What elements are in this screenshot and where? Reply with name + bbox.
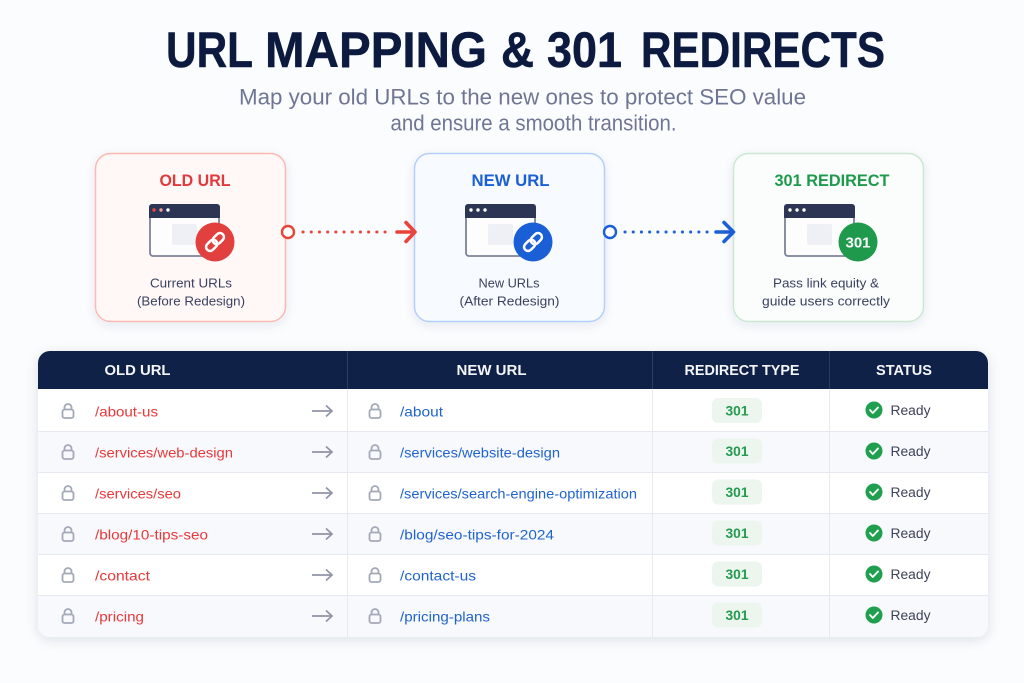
row: contact: Ready	[890, 567, 931, 582]
description: 301 redirect: guide users correctly	[762, 294, 891, 308]
row: contact: /contact	[95, 568, 150, 584]
table header: NEW URL	[456, 363, 527, 379]
description: new URL: New URLs	[478, 276, 540, 290]
table header: REDIRECT TYPE	[684, 363, 800, 379]
row: seo	[62, 480, 931, 504]
row: pricing: Ready	[890, 608, 931, 623]
description: new URL: (After Redesign)	[460, 294, 560, 308]
row: seo: Ready	[890, 485, 931, 500]
row: contact	[62, 562, 931, 586]
description: new URL	[460, 276, 560, 308]
icon: browser window with link badge	[149, 204, 234, 262]
row: seo: 301	[726, 485, 749, 500]
heading: new URL: NEW URL	[472, 172, 550, 190]
panel: 301 redirect	[734, 154, 924, 322]
table body	[38, 351, 988, 637]
table: URL redirect map	[38, 351, 988, 637]
row: blog: /blog/seo-tips-for-2024	[400, 526, 554, 542]
row: pricing: /pricing-plans	[400, 608, 490, 624]
title: URL	[166, 22, 253, 78]
table header	[38, 351, 988, 389]
row: web-design	[62, 438, 931, 464]
panel: old URL	[96, 154, 286, 322]
row: about-us: /about-us	[95, 404, 158, 420]
row: pricing: /pricing	[95, 608, 144, 624]
row: about-us: Ready	[890, 403, 931, 418]
table header: OLD URL	[104, 363, 171, 379]
description: 301 redirect: Pass link equity &	[773, 276, 879, 290]
row: web-design: 301	[726, 444, 749, 459]
heading: 301 redirect: 301 REDIRECT	[774, 172, 890, 190]
icon: browser window with link badge	[465, 204, 552, 262]
arrow: new to redirect	[604, 222, 734, 242]
subtitle: and ensure a smooth transition.	[390, 110, 676, 136]
description: old URL	[137, 276, 245, 308]
row: web-design: /services/website-design	[400, 444, 560, 460]
row: contact: 301	[726, 567, 749, 582]
row: pricing	[62, 602, 931, 628]
heading: old URL: OLD URL	[160, 172, 230, 190]
icon: browser window with 301 badge	[784, 204, 878, 262]
subtitle	[239, 84, 806, 136]
row: about-us: /about	[400, 404, 443, 420]
row: blog	[62, 520, 931, 546]
title: MAPPING	[265, 22, 487, 78]
row: web-design: Ready	[890, 444, 931, 459]
panel: new URL	[414, 154, 604, 322]
row: seo: /services/seo	[95, 486, 181, 502]
table header: STATUS	[876, 363, 932, 379]
arrow: old to new	[282, 222, 415, 242]
row: pricing: 301	[726, 608, 749, 623]
row: seo: /services/search-engine-optimization	[400, 486, 637, 502]
title: 301	[547, 22, 622, 78]
description: old URL: Current URLs	[150, 276, 233, 290]
row: web-design: /services/web-design	[95, 444, 233, 460]
row: blog: 301	[726, 526, 749, 541]
description: 301 redirect	[762, 276, 891, 308]
title	[166, 22, 885, 78]
title: &	[501, 22, 534, 78]
row: about-us	[62, 398, 931, 423]
row: about-us: 301	[726, 404, 749, 418]
row: contact: /contact-us	[400, 568, 476, 584]
description: old URL: (Before Redesign)	[137, 294, 245, 308]
row: blog: Ready	[890, 526, 931, 541]
title: REDIRECTS	[641, 22, 885, 78]
subtitle: Map your old URLs to the new ones to protect SEO value	[239, 84, 806, 110]
row: blog: /blog/10-tips-seo	[95, 526, 208, 542]
icon: browser window with 301 badge: 301	[846, 234, 870, 252]
